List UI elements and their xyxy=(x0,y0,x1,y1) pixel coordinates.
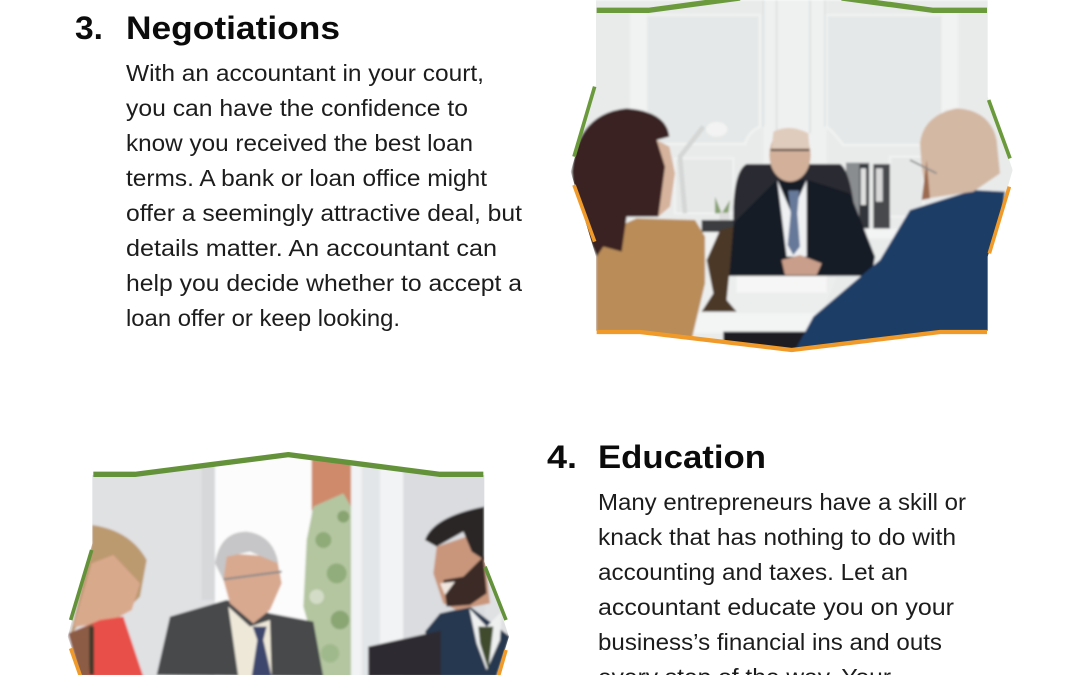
chair xyxy=(732,162,854,223)
heading: 4. Education: Education xyxy=(598,439,766,475)
body text: education: accountant educate you on your xyxy=(598,594,954,620)
heading: 4. Education: 4. xyxy=(547,439,577,475)
wainscot xyxy=(675,157,923,217)
heading: 3. Negotiations: 3. xyxy=(75,10,103,46)
binders xyxy=(846,163,869,229)
body text: negotiations: details matter. An accountant can xyxy=(126,235,497,261)
photo content xyxy=(560,0,1027,355)
photo frame: green and orange accents xyxy=(574,0,1010,350)
body text: negotiations xyxy=(126,60,523,331)
body text: negotiations: offer a seemingly attractive deal, but xyxy=(126,200,522,226)
centre man xyxy=(725,180,875,276)
heading: 3. Negotiations: Negotiations xyxy=(126,10,340,46)
statue xyxy=(702,227,737,312)
body text: education xyxy=(598,489,966,675)
right man xyxy=(793,190,1005,353)
body text: negotiations: With an accountant in your court, xyxy=(126,60,484,86)
photo content xyxy=(50,453,517,675)
body text: education: Many entrepreneurs have a skill or xyxy=(598,489,966,515)
body text: education: accounting and taxes. Let an xyxy=(598,559,908,585)
body text: education: knack that has nothing to do with xyxy=(598,524,956,550)
centre man xyxy=(157,600,323,675)
woman xyxy=(70,525,147,637)
body text: negotiations: you can have the confidence to xyxy=(126,95,468,121)
lamp xyxy=(680,127,703,213)
body text: negotiations: loan offer or keep looking. xyxy=(126,305,400,331)
body text: negotiations: terms. A bank or loan office might xyxy=(126,165,487,191)
right man xyxy=(425,607,510,675)
section 4: Education xyxy=(50,439,966,675)
photo: meeting with an accountant at a desk xyxy=(560,0,1027,355)
body text: negotiations: help you decide whether to accept a xyxy=(126,270,523,296)
section 3: Negotiations xyxy=(75,0,1027,355)
desk xyxy=(687,277,837,333)
photo frame: green and orange accents xyxy=(71,455,506,675)
body text: negotiations: know you received the best loan xyxy=(126,130,473,156)
body text: education: business’s financial ins and outs xyxy=(598,629,942,655)
woman xyxy=(596,218,705,353)
shelf xyxy=(702,220,738,232)
photo: clients smiling with an accountant xyxy=(50,453,517,675)
laptop xyxy=(368,631,441,675)
